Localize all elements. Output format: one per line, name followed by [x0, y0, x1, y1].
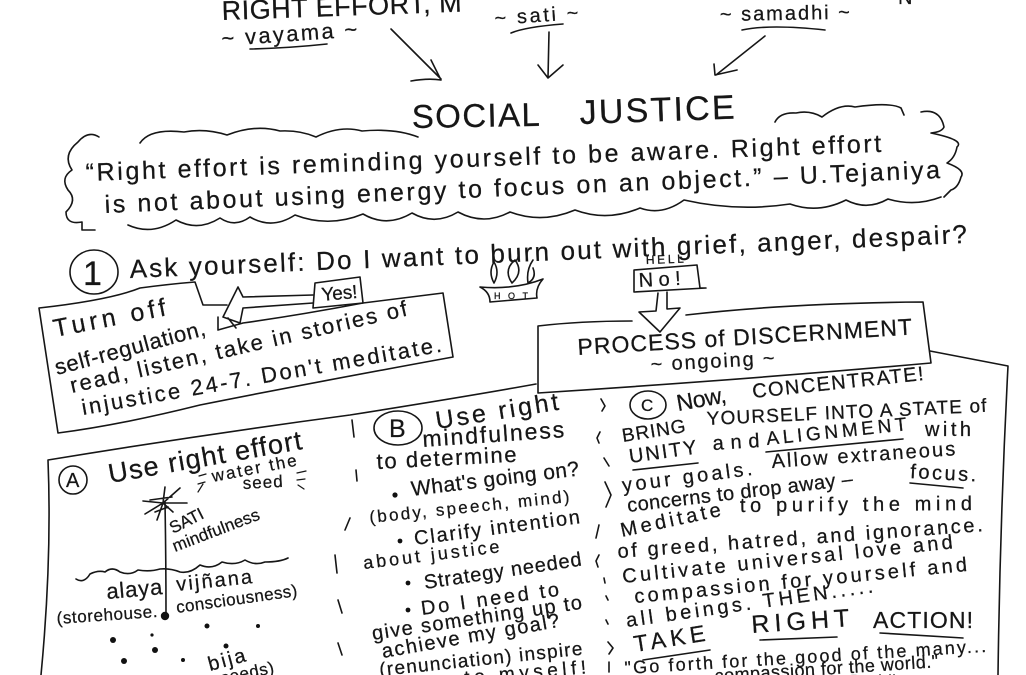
alaya vijnana label: [56, 566, 298, 628]
concentrate text: and: [712, 430, 760, 455]
list: about justice: [362, 536, 500, 573]
panel outline: three methods: [41, 351, 1008, 675]
heading B: to determine: [376, 442, 517, 474]
hell no box: No!: [638, 268, 681, 292]
arrow: no to discernment: [639, 292, 680, 332]
quote text: “Right effort is reminding yourself to be aware. Right effort: [85, 130, 882, 187]
letter A: [59, 466, 87, 494]
heading B: Use right: [434, 388, 560, 435]
alaya vijnana label: vijñana: [175, 566, 254, 596]
divider: B and C: [596, 399, 613, 672]
speech cloud with quote: [65, 105, 962, 230]
concentrate text: Allow extraneous: [771, 438, 956, 473]
list: What's going on?: [410, 458, 580, 501]
quote text: is not about using energy to focus on an object.” – U.Tejaniya: [104, 156, 941, 219]
concentrate text: YOURSELF INTO A STATE of: [706, 396, 988, 430]
take right action: TAKE: [632, 620, 707, 657]
letter C: [630, 391, 666, 419]
alaya vijnana label: consciousness): [175, 581, 298, 617]
panel: process of discernment: ~ ongoing ~: [650, 348, 775, 376]
list: Clarify intention: [413, 506, 581, 550]
turn off text: self-regulation,: [52, 316, 208, 380]
yes box: Yes!: [321, 282, 358, 306]
take right action: ACTION!: [873, 607, 973, 633]
heading C: [674, 363, 925, 416]
turn off text: Turn off: [51, 294, 168, 343]
list: Do I need to: [420, 579, 560, 620]
heading C: Now,: [674, 382, 728, 416]
icon: hot pot with flames: HOT: [494, 291, 528, 301]
quote text: [85, 130, 941, 219]
take right action: [632, 604, 973, 660]
list: give something up to: [370, 592, 583, 645]
title: JUSTICE: [579, 89, 735, 132]
title: [411, 89, 735, 135]
label: samadhi: ~ samadhi ~: [720, 2, 850, 26]
section B: right mindfulness: [362, 388, 587, 675]
step 1 number: [70, 250, 118, 294]
water the seed: water the: [209, 451, 298, 486]
alaya vijnana label: (storehouse.: [56, 602, 158, 628]
label: sati: ~ sati ~: [494, 2, 579, 30]
hell no box: HELL: [646, 252, 684, 267]
concentrate text: compassion for yourself and: [633, 554, 968, 608]
concentrate text: of greed, hatred, and ignorance.: [617, 514, 983, 563]
concentrate text: UNITY: [628, 437, 698, 468]
section C: right concentration and action: [617, 363, 988, 675]
concentrate text: Meditate: [618, 499, 723, 542]
letter C: C: [641, 396, 653, 415]
panel: process of discernment: [538, 302, 931, 393]
panel: turn off: [39, 277, 453, 433]
sati mindfulness label: SATI: [166, 504, 207, 538]
concentrate text: BRING: [620, 416, 687, 447]
list: (body, speech, mind): [368, 487, 570, 527]
turn off text: read, listen, take in stories of: [68, 296, 410, 398]
heading C: CONCENTRATE!: [751, 363, 925, 403]
list: achieve my goal?: [380, 610, 561, 663]
heading A: Use right effort: [106, 425, 305, 489]
sati mindfulness label: mindfulness: [170, 505, 262, 556]
concentrate text: focus.: [910, 461, 977, 486]
icon: hot pot with flames: [480, 260, 543, 302]
concentrate text: to purify the mind: [740, 493, 972, 517]
ground wave: [76, 558, 288, 581]
arrow: yes to turn off: [223, 287, 313, 328]
take right action: RIGHT: [750, 604, 850, 639]
seeds: [110, 624, 260, 664]
title: SOCIAL: [411, 96, 540, 135]
bija seeds label: bija: [206, 645, 249, 675]
heading B: mindfulness: [422, 416, 565, 452]
icon: palm tree: [143, 487, 187, 620]
concentrate text: [617, 396, 988, 632]
letter A: A: [66, 470, 80, 492]
concentrate text: with: [924, 419, 971, 441]
arrow: sati to social justice: [538, 32, 563, 78]
question heading: Ask yourself: Do I want to burn out with grief, anger, despair?: [129, 219, 968, 284]
alaya vijnana label: alaya: [105, 574, 164, 604]
arrow: vayama to social justice: [391, 29, 441, 81]
panel: process of discernment: PROCESS of DISCERNMENT: [577, 314, 913, 360]
heading B: [376, 388, 565, 474]
label: vayama: ~ vayama ~: [221, 17, 358, 51]
concentrate text: ALIGNMENT: [765, 414, 908, 450]
yes box: [313, 277, 363, 308]
concentrate text: all beings. THEN.....: [625, 576, 874, 632]
hell no box: [634, 252, 706, 292]
water the seed: seed: [242, 472, 283, 493]
letter B: B: [389, 415, 406, 443]
bija seeds label: [206, 645, 276, 675]
list: Strategy needed: [422, 549, 583, 594]
top heading: three factors: [221, 0, 912, 26]
concentrate text: concerns to drop away –: [626, 468, 855, 517]
section A: right effort: [56, 425, 306, 675]
arrow: samadhi to social justice: [714, 36, 765, 75]
letter B: [374, 411, 422, 445]
divider: A and B: [335, 420, 357, 655]
concentrate text: your goals.: [621, 458, 754, 497]
turn off text: injustice 24-7. Don't meditate.: [80, 332, 443, 420]
concentrate text: Cultivate universal love and: [621, 531, 954, 588]
list: [362, 458, 587, 675]
step 1 number: 1: [83, 255, 102, 293]
water the seed: [198, 451, 306, 493]
